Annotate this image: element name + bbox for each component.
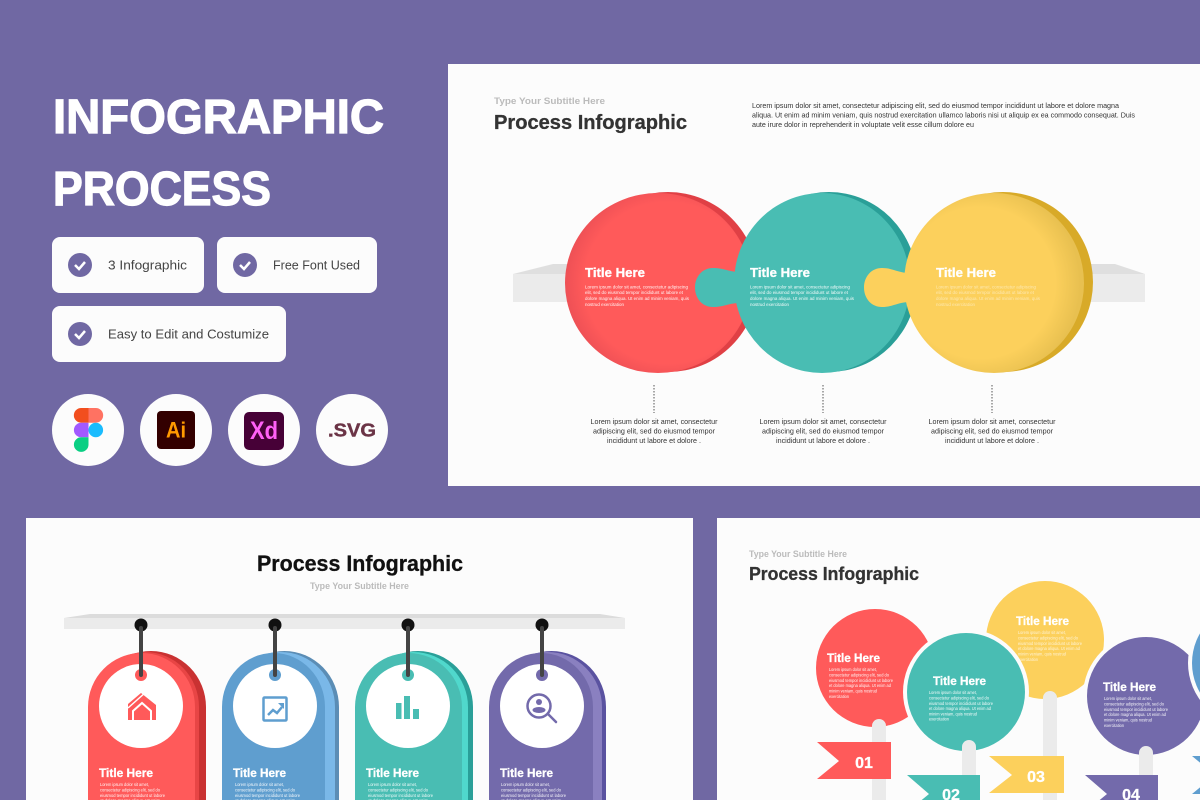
body text: consectetur adipiscing elit, sed do <box>829 672 890 678</box>
tag: red <box>88 651 206 800</box>
body text: consectetur adipiscing elit, sed do <box>1104 702 1165 706</box>
body text <box>1018 630 1083 662</box>
main title <box>53 91 384 216</box>
subtitle: Type Your Subtitle Here <box>310 581 409 591</box>
body text <box>235 782 301 800</box>
body text <box>750 284 854 307</box>
body text: dolore magna aliqua. Ut enim ad minim veniam, quis <box>936 296 1040 301</box>
panel: puzzle process slide <box>448 64 1200 486</box>
icon: Adobe XD <box>228 394 300 466</box>
panel: lollipop flags slide <box>717 518 1200 800</box>
body text: eiusmod tempor incididunt ut labore <box>1104 707 1169 712</box>
step 05: blue, cropped at the edge <box>1188 600 1200 794</box>
body text: Lorem ipsum dolor sit amet, consectetur adipiscing <box>750 284 851 290</box>
heading: Process Infographic <box>749 564 919 584</box>
body text: nostrud exercitation <box>936 302 976 307</box>
caption 1 with dotted line: Lorem ipsum dolor sit amet, consectetur <box>590 417 718 426</box>
body text: nostrud exercitation <box>750 302 790 307</box>
feature chip: Easy to Edit and Costumize <box>52 306 286 362</box>
step 03: yellow <box>986 581 1104 800</box>
body text: consectetur adipiscing elit, sed do <box>368 788 429 792</box>
body text: dolore magna aliqua. Ut enim ad minim veniam, quis <box>585 296 689 301</box>
icon: Adobe Illustrator: Ai <box>166 418 186 442</box>
shelf <box>64 614 625 629</box>
body text: consectetur adipiscing elit, sed do <box>501 788 562 792</box>
body text: Lorem ipsum dolor sit amet, <box>368 782 417 787</box>
main title: PROCESS <box>53 163 271 216</box>
body text: Lorem ipsum dolor sit amet, <box>235 782 284 787</box>
puzzle piece: teal <box>695 192 917 373</box>
icon: SVG <box>316 394 388 466</box>
body text <box>929 690 994 722</box>
feature chip: 3 Infographic <box>52 237 204 293</box>
body text: nostrud exercitation <box>585 302 625 307</box>
icon: house <box>128 692 156 721</box>
title: Title Here <box>750 265 810 280</box>
body text: consectetur adipiscing elit, sed do <box>929 696 990 700</box>
caption 3 with dotted line: Lorem ipsum dolor sit amet, consectetur <box>928 417 1056 426</box>
caption 2 with dotted line: incididunt ut labore et dolore . <box>776 436 870 445</box>
intro text <box>752 101 1135 129</box>
caption 3 with dotted line: adipiscing elit, sed do eiusmod tempor <box>931 426 1054 436</box>
caption 2 with dotted line: adipiscing elit, sed do eiusmod tempor <box>762 426 885 436</box>
feature chip: 3 Infographic: 3 Infographic <box>108 258 187 272</box>
subtitle: Type Your Subtitle Here <box>494 96 605 107</box>
body text: eiusmod tempor incididunt ut labore <box>235 793 301 798</box>
title: Title Here <box>936 265 996 280</box>
heading: Process Infographic <box>257 551 463 576</box>
icon: Adobe XD: Xd <box>250 417 278 445</box>
body text: consectetur adipiscing elit, sed do <box>235 788 296 792</box>
body text: et dolore magna aliqua. Ut enim ad <box>1018 646 1081 651</box>
body text <box>829 667 894 699</box>
body text: elit, sed do eiusmod tempor incididunt ut labore et <box>585 290 684 295</box>
body text: et dolore magna aliqua. Ut enim ad <box>1104 712 1167 717</box>
icon: bar chart <box>396 696 419 719</box>
body text: et dolore magna aliqua. Ut enim ad <box>829 683 892 688</box>
main title: INFOGRAPHIC <box>53 91 384 144</box>
feature chip: Easy to Edit and Costumize: Easy to Edit and Costumize <box>108 328 269 342</box>
tag: blue <box>222 651 339 800</box>
caption 1 with dotted line: adipiscing elit, sed do eiusmod tempor <box>593 426 716 436</box>
icon: Figma <box>52 394 124 466</box>
title: Title Here <box>1016 614 1069 628</box>
caption 2 with dotted line <box>760 385 887 445</box>
title: Title Here <box>233 766 286 780</box>
body text <box>1104 696 1169 728</box>
intro text: Lorem ipsum dolor sit amet, consectetur adipiscing elit, sed do eiusmod tempor incididunt ut labore et dolore magna <box>752 101 1119 110</box>
title: Title Here <box>585 265 645 280</box>
body text: Lorem ipsum dolor sit amet, <box>501 782 550 787</box>
flag 02 <box>907 775 980 800</box>
title: Title Here <box>1103 680 1156 694</box>
body text: eiusmod tempor incididunt ut labore <box>100 793 166 798</box>
panel: hanging tags slide <box>26 518 693 800</box>
body text: exercitation <box>829 694 850 699</box>
body text: eiusmod tempor incididunt ut labore <box>929 701 994 706</box>
body text: minim veniam, quis nostrud <box>1104 718 1153 722</box>
feature chip: Free Font Used: Free Font Used <box>273 258 360 272</box>
icon: Adobe Illustrator <box>140 394 212 466</box>
shelf <box>513 264 1145 302</box>
icon: SVG: .SVG <box>328 420 376 440</box>
puzzle piece: yellow <box>864 192 1093 373</box>
body text: minim veniam, quis nostrud <box>929 712 978 716</box>
step 04: purple <box>1083 633 1200 800</box>
caption 1 with dotted line <box>590 385 718 445</box>
body text: Lorem ipsum dolor sit amet, <box>1018 630 1066 635</box>
icon: chart frame <box>264 698 286 720</box>
caption 1 with dotted line: incididunt ut labore et dolore . <box>607 436 701 445</box>
caption 2 with dotted line: Lorem ipsum dolor sit amet, consectetur <box>760 417 887 426</box>
flag 01: 01 <box>855 755 873 772</box>
body text: consectetur adipiscing elit, sed do <box>100 788 161 792</box>
flag 03 <box>989 756 1064 793</box>
body text: minim veniam, quis nostrud <box>829 688 878 694</box>
body text: exercitation <box>929 716 950 722</box>
body text: elit, sed do eiusmod tempor incididunt ut labore et <box>936 290 1035 295</box>
body text: Lorem ipsum dolor sit amet, consectetur adipiscing <box>936 284 1037 290</box>
body text: elit, sed do eiusmod tempor incididunt ut labore et <box>750 290 849 295</box>
flag 01 <box>817 742 891 779</box>
puzzle piece: red <box>565 192 758 373</box>
body text: eiusmod tempor incididunt ut labore <box>501 793 567 798</box>
title: Title Here <box>366 766 419 780</box>
body text: dolore magna aliqua. Ut enim ad minim veniam, quis <box>750 296 854 301</box>
tag: teal <box>355 651 473 800</box>
icon: magnifier with person <box>528 694 556 722</box>
body text: eiusmod tempor incididunt ut labore <box>829 678 894 683</box>
caption 3 with dotted line <box>928 385 1056 445</box>
title: Title Here <box>500 766 553 780</box>
body text: Lorem ipsum dolor sit amet, <box>1104 696 1152 701</box>
title: Title Here <box>827 651 880 665</box>
body text <box>585 284 689 307</box>
caption 3 with dotted line: incididunt ut labore et dolore . <box>945 436 1039 445</box>
flag 03: 03 <box>1027 769 1045 786</box>
body text <box>100 782 166 800</box>
body text <box>501 782 567 800</box>
feature chip: Free Font Used <box>217 237 377 293</box>
body text: exercitation <box>1018 657 1039 662</box>
flag 04 <box>1085 775 1158 800</box>
body text: consectetur adipiscing elit, sed do <box>1018 636 1079 640</box>
body text: Lorem ipsum dolor sit amet, <box>829 667 877 672</box>
heading: Process Infographic <box>494 112 687 134</box>
body text <box>936 284 1040 307</box>
step 01: red <box>816 609 934 800</box>
body text: Lorem ipsum dolor sit amet, <box>100 782 149 787</box>
title: Title Here <box>933 674 986 688</box>
title: Title Here <box>99 766 153 780</box>
body text: exercitation <box>1104 723 1125 728</box>
hanging pins and strings <box>134 618 548 675</box>
body text: et dolore magna aliqua. Ut enim ad <box>929 706 992 711</box>
tag: purple <box>489 651 606 800</box>
body text: minim veniam, quis nostrud <box>1018 652 1067 656</box>
subtitle: Type Your Subtitle Here <box>749 549 847 559</box>
body text: eiusmod tempor incididunt ut labore <box>368 793 434 798</box>
body text: Lorem ipsum dolor sit amet, consectetur adipiscing <box>585 284 689 290</box>
intro text: aliqua. Ut enim ad minim veniam, quis nostrud exercitation ullamco laboris nisi ut aliquip ex ea commodo consequat. Duis <box>752 110 1135 120</box>
body text: eiusmod tempor incididunt ut labore <box>1018 641 1083 646</box>
step 02: teal <box>903 629 1029 800</box>
intro text: aute irure dolor in reprehenderit in voluptate velit esse cillum dolore eu <box>752 120 974 129</box>
body text: Lorem ipsum dolor sit amet, <box>929 690 977 695</box>
body text <box>368 782 434 800</box>
